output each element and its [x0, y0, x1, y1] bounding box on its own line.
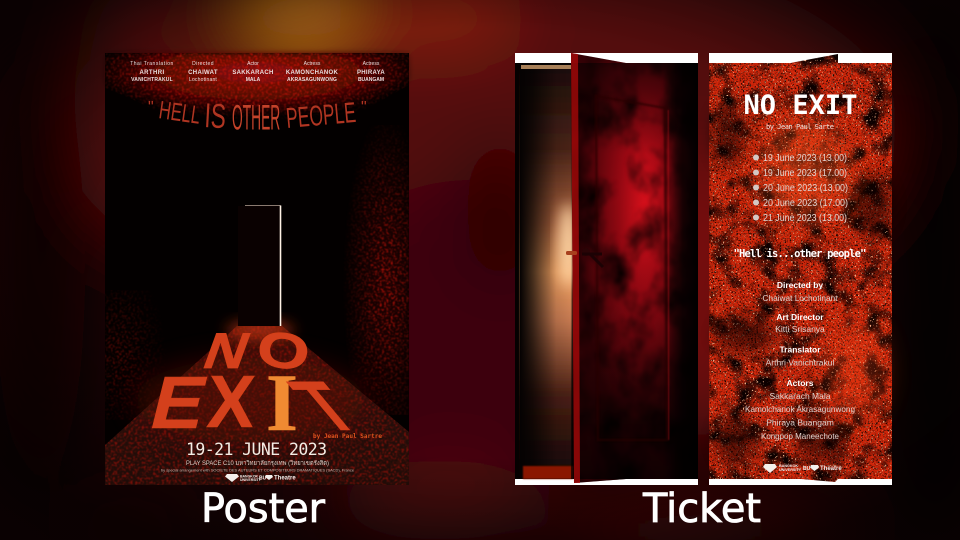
title: NO EXIT: E: [143, 362, 215, 444]
venue: PLAY SPACE C10 มหาวิทยาลัยกรุงเทพ (วิทยาเขตรังสิต): [186, 459, 329, 467]
poster logos: [225, 474, 296, 482]
ticket credits: Phiraya Buangam: [766, 418, 834, 428]
date: 19-21 JUNE 2023: [186, 440, 327, 459]
panel: poster: [105, 53, 409, 485]
title: NO EXIT: X: [205, 361, 257, 443]
ticket logos: BANGKOK: [779, 464, 798, 468]
label: Poster: Poster: [201, 486, 326, 532]
door opening light: [520, 65, 577, 479]
poster doorway: [238, 206, 282, 326]
credits row: Actress: [363, 61, 380, 67]
ticket logos: UNIVERSITY: [779, 468, 802, 472]
credits row: KAMONCHANOK: [286, 70, 339, 76]
credits row: SAKKARACH: [232, 70, 274, 76]
ticket quote: "Hell is...other people": [734, 248, 866, 260]
poster logos: UNIVERSITY: [240, 478, 262, 482]
credits row: Actress: [304, 61, 321, 67]
ticket credits: Directed by: [777, 280, 823, 290]
ticket credits: [745, 280, 855, 441]
panel: ticket back: [709, 53, 892, 485]
poster left wall texture: [105, 290, 161, 420]
credits row: CHAIWAT: [188, 70, 218, 76]
ticket credits: Kitti Srisanya: [775, 324, 825, 334]
showtimes list: 19 June 2023 (13.00): [763, 153, 847, 164]
ticket credits: Arthri Vanichtrakul: [766, 358, 835, 368]
quote: hell is other people: OTHER: [232, 98, 280, 137]
showtimes list: [753, 153, 848, 224]
poster logos: BU: [259, 476, 267, 482]
quote: hell is other people: ": [361, 99, 367, 116]
credits row: [130, 61, 385, 83]
title: NO EXIT: I: [266, 357, 298, 448]
ticket credits: Actors: [787, 378, 814, 388]
ticket credits: Art Director: [776, 312, 824, 322]
credits row: VANICHTRAKUL: [131, 77, 173, 83]
quote: hell is other people: HELL: [157, 96, 202, 130]
panel: ticket front door: [515, 53, 698, 485]
title: NO EXIT: [143, 319, 377, 448]
ticket white band: [515, 53, 698, 485]
ticket credits: Chaiwat Lochotinant: [762, 293, 838, 303]
door handle: [566, 248, 603, 267]
ticket texture: [709, 53, 892, 485]
credits row: AKRASAGUNWONG: [287, 77, 337, 83]
ticket credits: Translator: [779, 344, 821, 354]
credits row: PHIRAYA: [357, 70, 385, 76]
credits row: Lochotinant: [189, 77, 217, 83]
credits row: ARTHRI: [139, 70, 165, 76]
poster ceiling red texture: [104, 50, 412, 119]
title: NO EXIT: N: [196, 323, 258, 379]
title: NO EXIT: T: [273, 367, 377, 445]
quote: hell is other people: PEOPLE: [285, 97, 357, 135]
door leaf: [571, 53, 698, 483]
poster logos: BANGKOK: [240, 474, 259, 478]
showtimes list: 20 June 2023 (13.00): [763, 183, 848, 194]
credits row: BUANGAM: [358, 77, 384, 83]
label: Ticket: Ticket: [642, 486, 761, 532]
ticket credits: Sakkarach Mala: [770, 391, 831, 401]
byline: by Jean Paul Sartre: [313, 432, 382, 440]
arrangement line: by special arrangement with SOCIETE DES AUTEURS ET COMPOSITEURS DRAMATIQUES (SACD), France: [161, 468, 354, 472]
ticket logos: Theatre: [820, 466, 842, 472]
showtimes list: 20 June 2023 (17.00): [763, 198, 848, 209]
showtimes list: 21 June 2023 (13.00): [763, 213, 847, 224]
title: NO EXIT: O: [253, 319, 313, 382]
showtimes list: 19 June 2023 (17.00): [763, 168, 847, 179]
ticket logos: [763, 464, 842, 473]
credits row: Actor: [247, 61, 259, 67]
credits row: Directed: [192, 61, 214, 67]
quote: hell is other people: [148, 96, 367, 137]
ticket title: NO EXIT: [744, 90, 858, 121]
quote: hell is other people: IS: [204, 97, 227, 136]
ticket byline: by Jean Paul Sarte: [766, 123, 834, 131]
credits row: MALA: [246, 77, 261, 83]
ticket credits: Kamolchanok Akrasagunwong: [745, 404, 855, 414]
ticket logos: BU: [803, 466, 811, 472]
poster right wall texture: [346, 125, 409, 415]
poster floor: [105, 321, 409, 485]
ticket credits: Kongpop Maneechote: [761, 431, 839, 441]
poster logos: Theatre: [274, 476, 296, 482]
credits row: Thai Translation: [130, 61, 174, 67]
quote: hell is other people: ": [148, 99, 154, 116]
